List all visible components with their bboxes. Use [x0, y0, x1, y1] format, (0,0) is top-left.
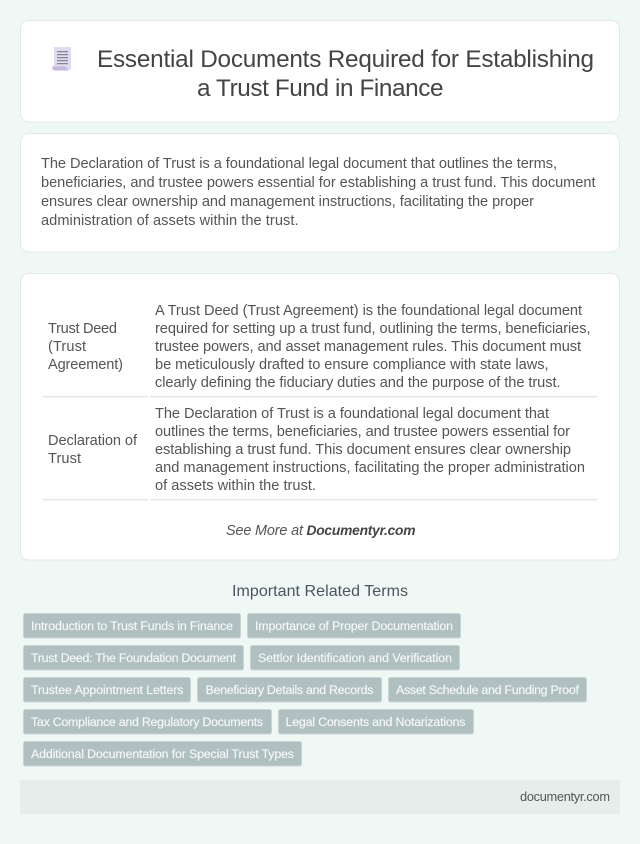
text block: introduction paragraph: The Declaration of Trust is a foundational legal document that outlines the terms, [41, 156, 557, 172]
chip: Trust Deed: The Foundation Document [31, 651, 237, 665]
text block: Declaration of Trust description [155, 406, 585, 494]
footer: documentyr.com [520, 789, 610, 804]
text block: introduction paragraph: ensures clear ownership and management instructions, facilitating the proper [41, 194, 534, 210]
title: Essential Documents Required for Establishing [97, 46, 594, 73]
text block: introduction paragraph: administration of assets within the trust. [41, 213, 298, 229]
label: Trust Deed [48, 321, 123, 373]
label: Trust Deed: Agreement) [48, 357, 123, 373]
footer [20, 780, 620, 814]
chip [250, 646, 460, 670]
text block: Trust Deed description [155, 303, 590, 391]
icon: document scroll [52, 47, 71, 70]
panel: documents table [20, 274, 620, 560]
chip: Settlor Identification and Verification [258, 651, 452, 665]
callout: see more link: See More at [226, 523, 304, 539]
table row: Declaration of Trust [48, 406, 585, 494]
chip: Additional Documentation for Special Trust Types [31, 747, 294, 761]
panel: related term chips [24, 614, 586, 766]
text block: Declaration of Trust description: outlines the terms, beneficiaries, and trustee powers essential for [155, 424, 570, 440]
callout: see more link: Documentyr.com [306, 523, 416, 538]
text block: Declaration of Trust description: The Declaration of Trust is a foundational legal document that [155, 406, 549, 422]
chip [388, 678, 586, 702]
label: Trust Deed: (Trust [48, 339, 86, 355]
label: Declaration of Trust [48, 433, 138, 467]
chip: Tax Compliance and Regulatory Documents [31, 715, 263, 729]
chip [24, 742, 302, 766]
chip [24, 678, 190, 702]
callout: see more link [226, 523, 416, 539]
chip: Asset Schedule and Funding Proof [396, 683, 580, 697]
chip [24, 710, 272, 734]
title: a Trust Fund in Finance [197, 75, 444, 102]
label: Declaration of Trust: Declaration of [48, 433, 138, 449]
chip [24, 646, 244, 670]
text block: Trust Deed description: A Trust Deed (Trust Agreement) is the foundational legal document [155, 303, 582, 319]
text block: Declaration of Trust description: of assets within the trust. [155, 478, 316, 494]
text block: introduction paragraph: beneficiaries, and trustee powers essential for establishing a trust fund. This document [41, 175, 596, 191]
chip [24, 614, 240, 638]
panel: introduction [20, 134, 620, 252]
text block: Declaration of Trust description: establishing a trust fund. This document ensures clear ownership [155, 442, 571, 458]
chip [198, 678, 382, 702]
label: Declaration of Trust: Trust [48, 451, 81, 467]
chip: Beneficiary Details and Records [206, 683, 374, 697]
chip: Legal Consents and Notarizations [286, 715, 466, 729]
chip [248, 614, 460, 638]
heading: important related terms: Important Related Terms [232, 583, 408, 600]
title [97, 46, 594, 102]
text block: Declaration of Trust description: and management instructions, facilitating the proper administration [155, 460, 585, 476]
chip: Importance of Proper Documentation [255, 619, 453, 633]
text block: Trust Deed description: required for setting up a trust fund, outlining the terms, beneficiaries, [155, 321, 590, 337]
table row: Trust Deed [48, 303, 590, 391]
label: Trust Deed: Trust Deed [48, 321, 117, 337]
panel: title card [20, 20, 620, 122]
text block: introduction paragraph [41, 156, 596, 229]
chip: Trustee Appointment Letters [31, 683, 184, 697]
text block: Trust Deed description: clearly defining the fiduciary duties and the purpose of the trust. [155, 375, 560, 391]
chip: Introduction to Trust Funds in Finance [31, 619, 233, 633]
text block: Trust Deed description: trustee powers, and asset management rules. This document must [155, 339, 581, 355]
text block: Trust Deed description: be meticulously drafted to ensure compliance with state laws, [155, 357, 548, 373]
chip [278, 710, 474, 734]
